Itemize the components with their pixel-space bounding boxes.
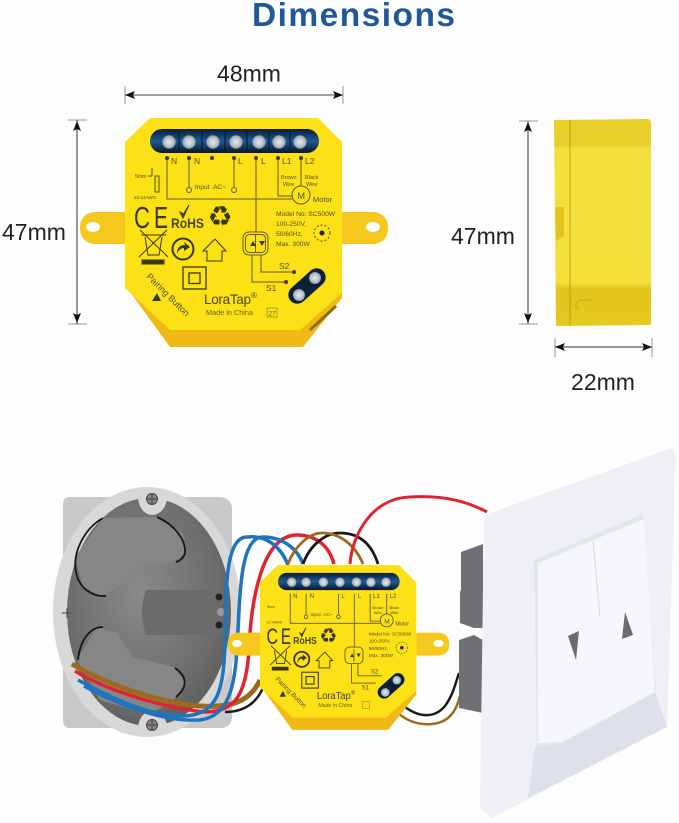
terminal labels: L1 [282,156,292,166]
switch back blocks [459,544,483,713]
cavity knockouts [75,517,187,715]
terminal labels: Motor [395,621,409,627]
blue wire one [78,537,288,716]
switch terminal screws [293,272,321,301]
green dot symbol [172,238,194,260]
brand name: LoraTap [204,292,251,307]
red live wire to switch [350,497,487,564]
terminal labels [134,156,333,293]
terminal labels: N [310,593,314,600]
CE mark [266,624,291,649]
pairing button label: Pairing Button [145,271,192,318]
dimension: depth 22mm: 22mm [571,369,635,395]
dimension: width 48mm: 48mm [217,60,281,86]
RoHS mark [293,628,317,647]
model specification: Max. 300W [276,241,311,248]
CE mark: E [281,624,291,649]
installation: mounting box [53,487,241,737]
dimension: height 47mm side: 47mm [451,223,515,249]
blue wire two [84,537,303,720]
RoHS mark: RoHS [171,215,204,231]
model specification: 100-250V, [369,639,391,645]
terminal strip [278,573,400,590]
model specification: Model No: SC500W [369,632,412,638]
body face [125,118,342,330]
terminal screws [287,578,391,587]
made in china: Made in China [318,703,352,709]
terminal screws [162,136,306,148]
rocker divider [593,541,600,617]
glass plate [490,448,676,818]
terminal strip [150,129,319,153]
model specification [276,211,336,248]
terminal labels: L [238,156,243,166]
RoHS mark: RoHS [293,636,317,647]
cavity centre block [142,590,223,635]
switch terminal screws [381,676,401,697]
black lower wire [225,685,264,712]
brown wire to switch [398,696,460,724]
terminal labels: L1 [373,593,380,600]
wire strip gauge icon [148,168,159,192]
terminal labels: N [293,593,298,600]
model specification: Model No: SC500W [276,211,336,218]
switch terminal [285,265,329,307]
CE mark: C [134,200,150,235]
terminal labels: Input AC~ [195,184,226,191]
body lower edge [125,250,342,347]
switch terminal [375,671,407,701]
mounting ears [228,633,449,656]
WEEE symbol [270,646,291,670]
registered mark: ® [351,690,356,697]
green dot symbol [294,652,309,667]
model specification: 50/60Hz, [276,231,303,238]
box plate [63,497,232,728]
plate shadow area [528,692,667,798]
black wire to switch [405,673,459,715]
box cavity [67,498,231,726]
double insulation symbol [302,672,318,688]
RoHS mark [171,205,204,231]
date code box [267,308,277,318]
registered mark: ® [251,291,257,300]
product: module side view [554,119,651,326]
body lower edge [260,660,416,730]
terminal labels: S1 [266,283,277,293]
terminal labels: 5mm [135,174,146,180]
terminal labels: L2 [305,156,315,166]
red bundle wire [75,535,334,712]
CE mark: C [266,624,278,649]
terminal labels: Wire [390,610,399,615]
model specification: Max. 300W [369,653,394,659]
terminal labels: Brown [281,175,297,181]
dimension: depth 22mm [555,338,652,395]
wiring diagram [290,594,393,683]
terminal labels: M [384,618,390,625]
switch box arrows [350,654,361,657]
terminal labels: 22-14AWG [134,195,157,200]
black upper wire [303,533,378,564]
dimension: height 47mm front: 47mm [2,219,66,245]
side latch [576,300,593,309]
pairing LED [396,642,408,654]
installation: wires [72,497,487,724]
ear holes [86,222,380,232]
product: module front view [80,118,388,347]
lug screws [62,494,158,730]
knockout outlines [75,517,185,697]
pairing LED [314,225,330,241]
house symbol [316,652,333,668]
glass plate edge [480,511,496,818]
mounting ears [80,212,388,244]
installation: wall switch [459,448,676,818]
brand name: LoraTap [317,691,351,702]
installation: module [228,565,449,730]
terminal labels: Black [390,605,399,610]
ear holes [232,640,444,647]
terminal labels: Black [305,175,319,181]
dimension: height 47mm side [451,121,538,324]
terminal labels: Wire [283,182,294,188]
terminal labels: N [194,156,200,166]
terminal labels: Brown [372,605,383,610]
pairing button label: Pairing Button [274,676,308,710]
WEEE symbol [139,230,168,264]
brown bundle wire [72,664,260,706]
brown upper wire [288,533,363,564]
terminal labels [266,593,409,692]
CE mark: E [154,200,168,235]
strip dividers [179,131,290,151]
side body [554,119,651,326]
wiring diagram [167,158,310,282]
side slot [310,306,336,330]
terminal labels: Wire [374,610,383,615]
terminal labels: S2 [279,261,290,271]
terminal labels: Motor [313,195,333,204]
recycling symbol: ♻ [319,624,337,648]
model specification [369,632,412,659]
pairing arrow [279,691,286,697]
terminal labels: L [358,593,362,600]
double insulation symbol [183,267,206,289]
side ear stub [555,207,564,241]
terminal dots [165,156,303,284]
up arrow [622,612,633,639]
box lugs [138,494,168,730]
pairing arrow [152,293,161,301]
box ring [53,487,241,737]
CE mark [134,200,168,235]
terminal labels: M [298,191,305,201]
date code box: 27 [268,310,276,318]
terminal labels: 22-14AWG [266,620,283,624]
terminal labels: L [261,156,266,166]
model specification: 100-250V, [276,221,306,228]
body face [260,565,416,718]
terminal labels: 5mm [267,605,275,609]
model specification: 50/60Hz, [369,646,388,652]
terminal labels: Wire [306,182,317,188]
down arrow [568,631,579,660]
terminal labels: L [341,593,345,600]
side seam [569,120,571,326]
date code box [362,702,369,708]
terminal labels: Input AC~ [310,612,333,617]
block holes [216,594,225,628]
house symbol [203,239,226,261]
terminal labels: S2 [371,669,379,676]
dimension: width 48mm [125,60,343,104]
recycling symbol: ♻ [207,200,233,233]
rocker frame [534,514,656,747]
terminal labels: L2 [390,593,397,600]
terminal labels: S1 [362,685,370,692]
made in china: Made in China [206,308,254,317]
dimension: height 47mm front [2,120,87,324]
terminal labels: N [171,156,177,166]
rocker face [538,519,655,743]
